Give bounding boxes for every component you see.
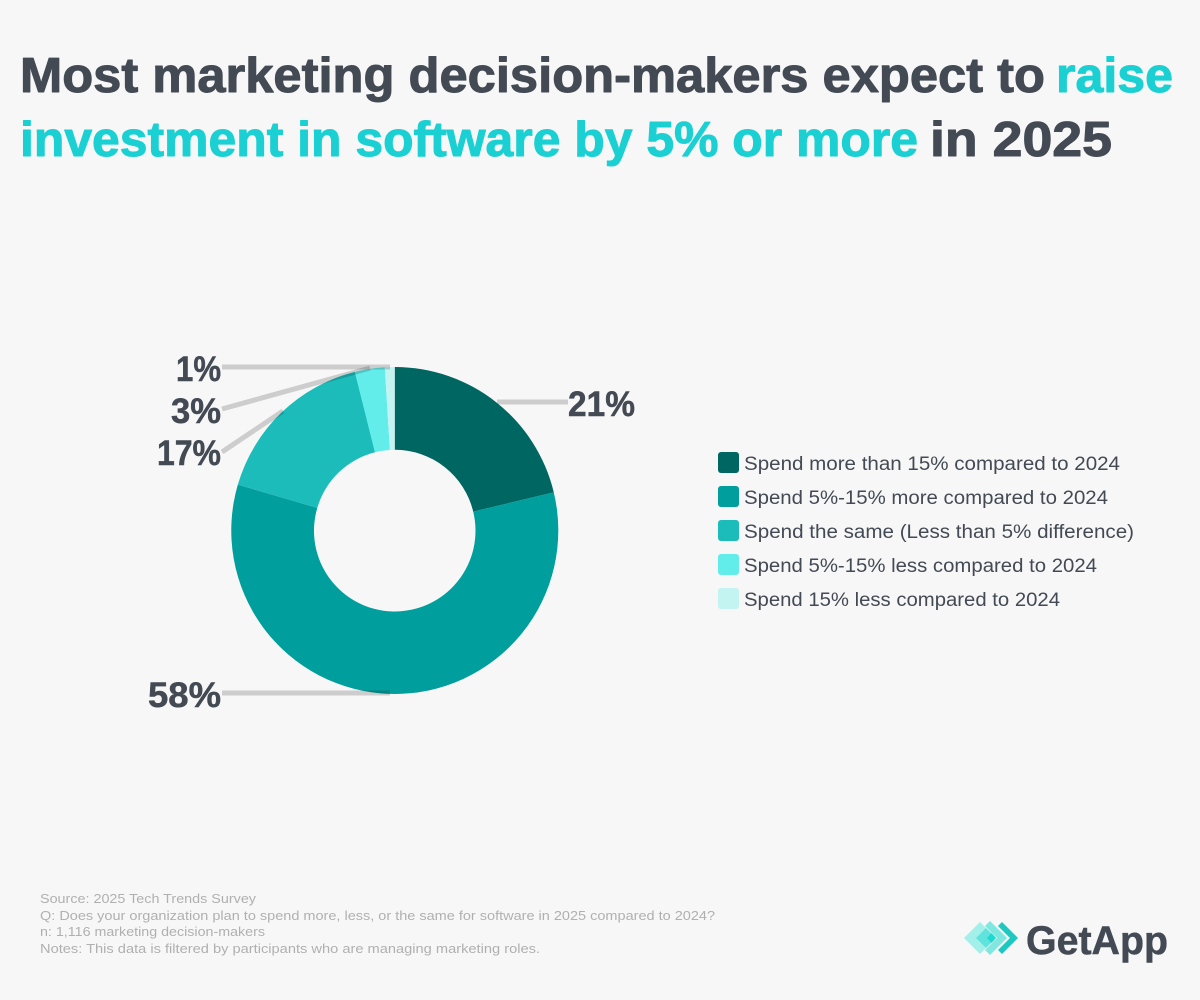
slice: spend 15% less xyxy=(385,367,395,450)
source notes: n: 1,116 marketing decision-makers xyxy=(40,924,266,939)
title: investment in software by 5% or more xyxy=(20,113,918,167)
slice: spend more than 15% xyxy=(395,367,554,512)
logo: GetApp xyxy=(964,919,1168,963)
title xyxy=(20,49,1173,167)
title: raise xyxy=(1056,49,1173,103)
legend item: 5%-15% less: Spend 5%-15% less compared to 2024 xyxy=(744,556,1097,577)
percentage labels: 17% xyxy=(157,434,221,473)
source notes: Q: Does your organization plan to spend more, less, or the same for software in 2025 compared to 2024? xyxy=(40,908,715,923)
percentage labels: 58% xyxy=(148,676,221,715)
source notes: Notes: This data is filtered by participants who are managing marketing roles. xyxy=(40,941,540,956)
donut chart xyxy=(231,367,558,694)
legend xyxy=(718,452,1134,611)
title: Most marketing decision-makers expect to xyxy=(20,49,1045,103)
legend item: same: Spend the same (Less than 5% difference) xyxy=(744,522,1134,543)
percentage labels: 3% xyxy=(171,392,221,431)
legend item: more than 15%: Spend more than 15% compared to 2024 xyxy=(744,454,1120,475)
slice: spend 5%-15% less xyxy=(355,367,390,452)
legend item: 5%-15% more: Spend 5%-15% more compared to 2024 xyxy=(744,488,1108,509)
percentage labels: 1% xyxy=(176,350,221,389)
logo wordmark: GetApp xyxy=(1026,919,1168,963)
slice: spend 5%-15% more xyxy=(231,485,558,694)
source notes: Source: 2025 Tech Trends Survey xyxy=(40,891,257,906)
source notes xyxy=(40,891,715,956)
logo icon xyxy=(964,921,1018,955)
leader lines xyxy=(222,367,568,693)
title: in 2025 xyxy=(930,113,1112,167)
legend item: 15% less: Spend 15% less compared to 2024 xyxy=(744,590,1060,611)
percentage labels: 21% xyxy=(568,385,635,424)
slice: spend the same xyxy=(238,372,375,508)
percentage labels xyxy=(148,350,635,715)
